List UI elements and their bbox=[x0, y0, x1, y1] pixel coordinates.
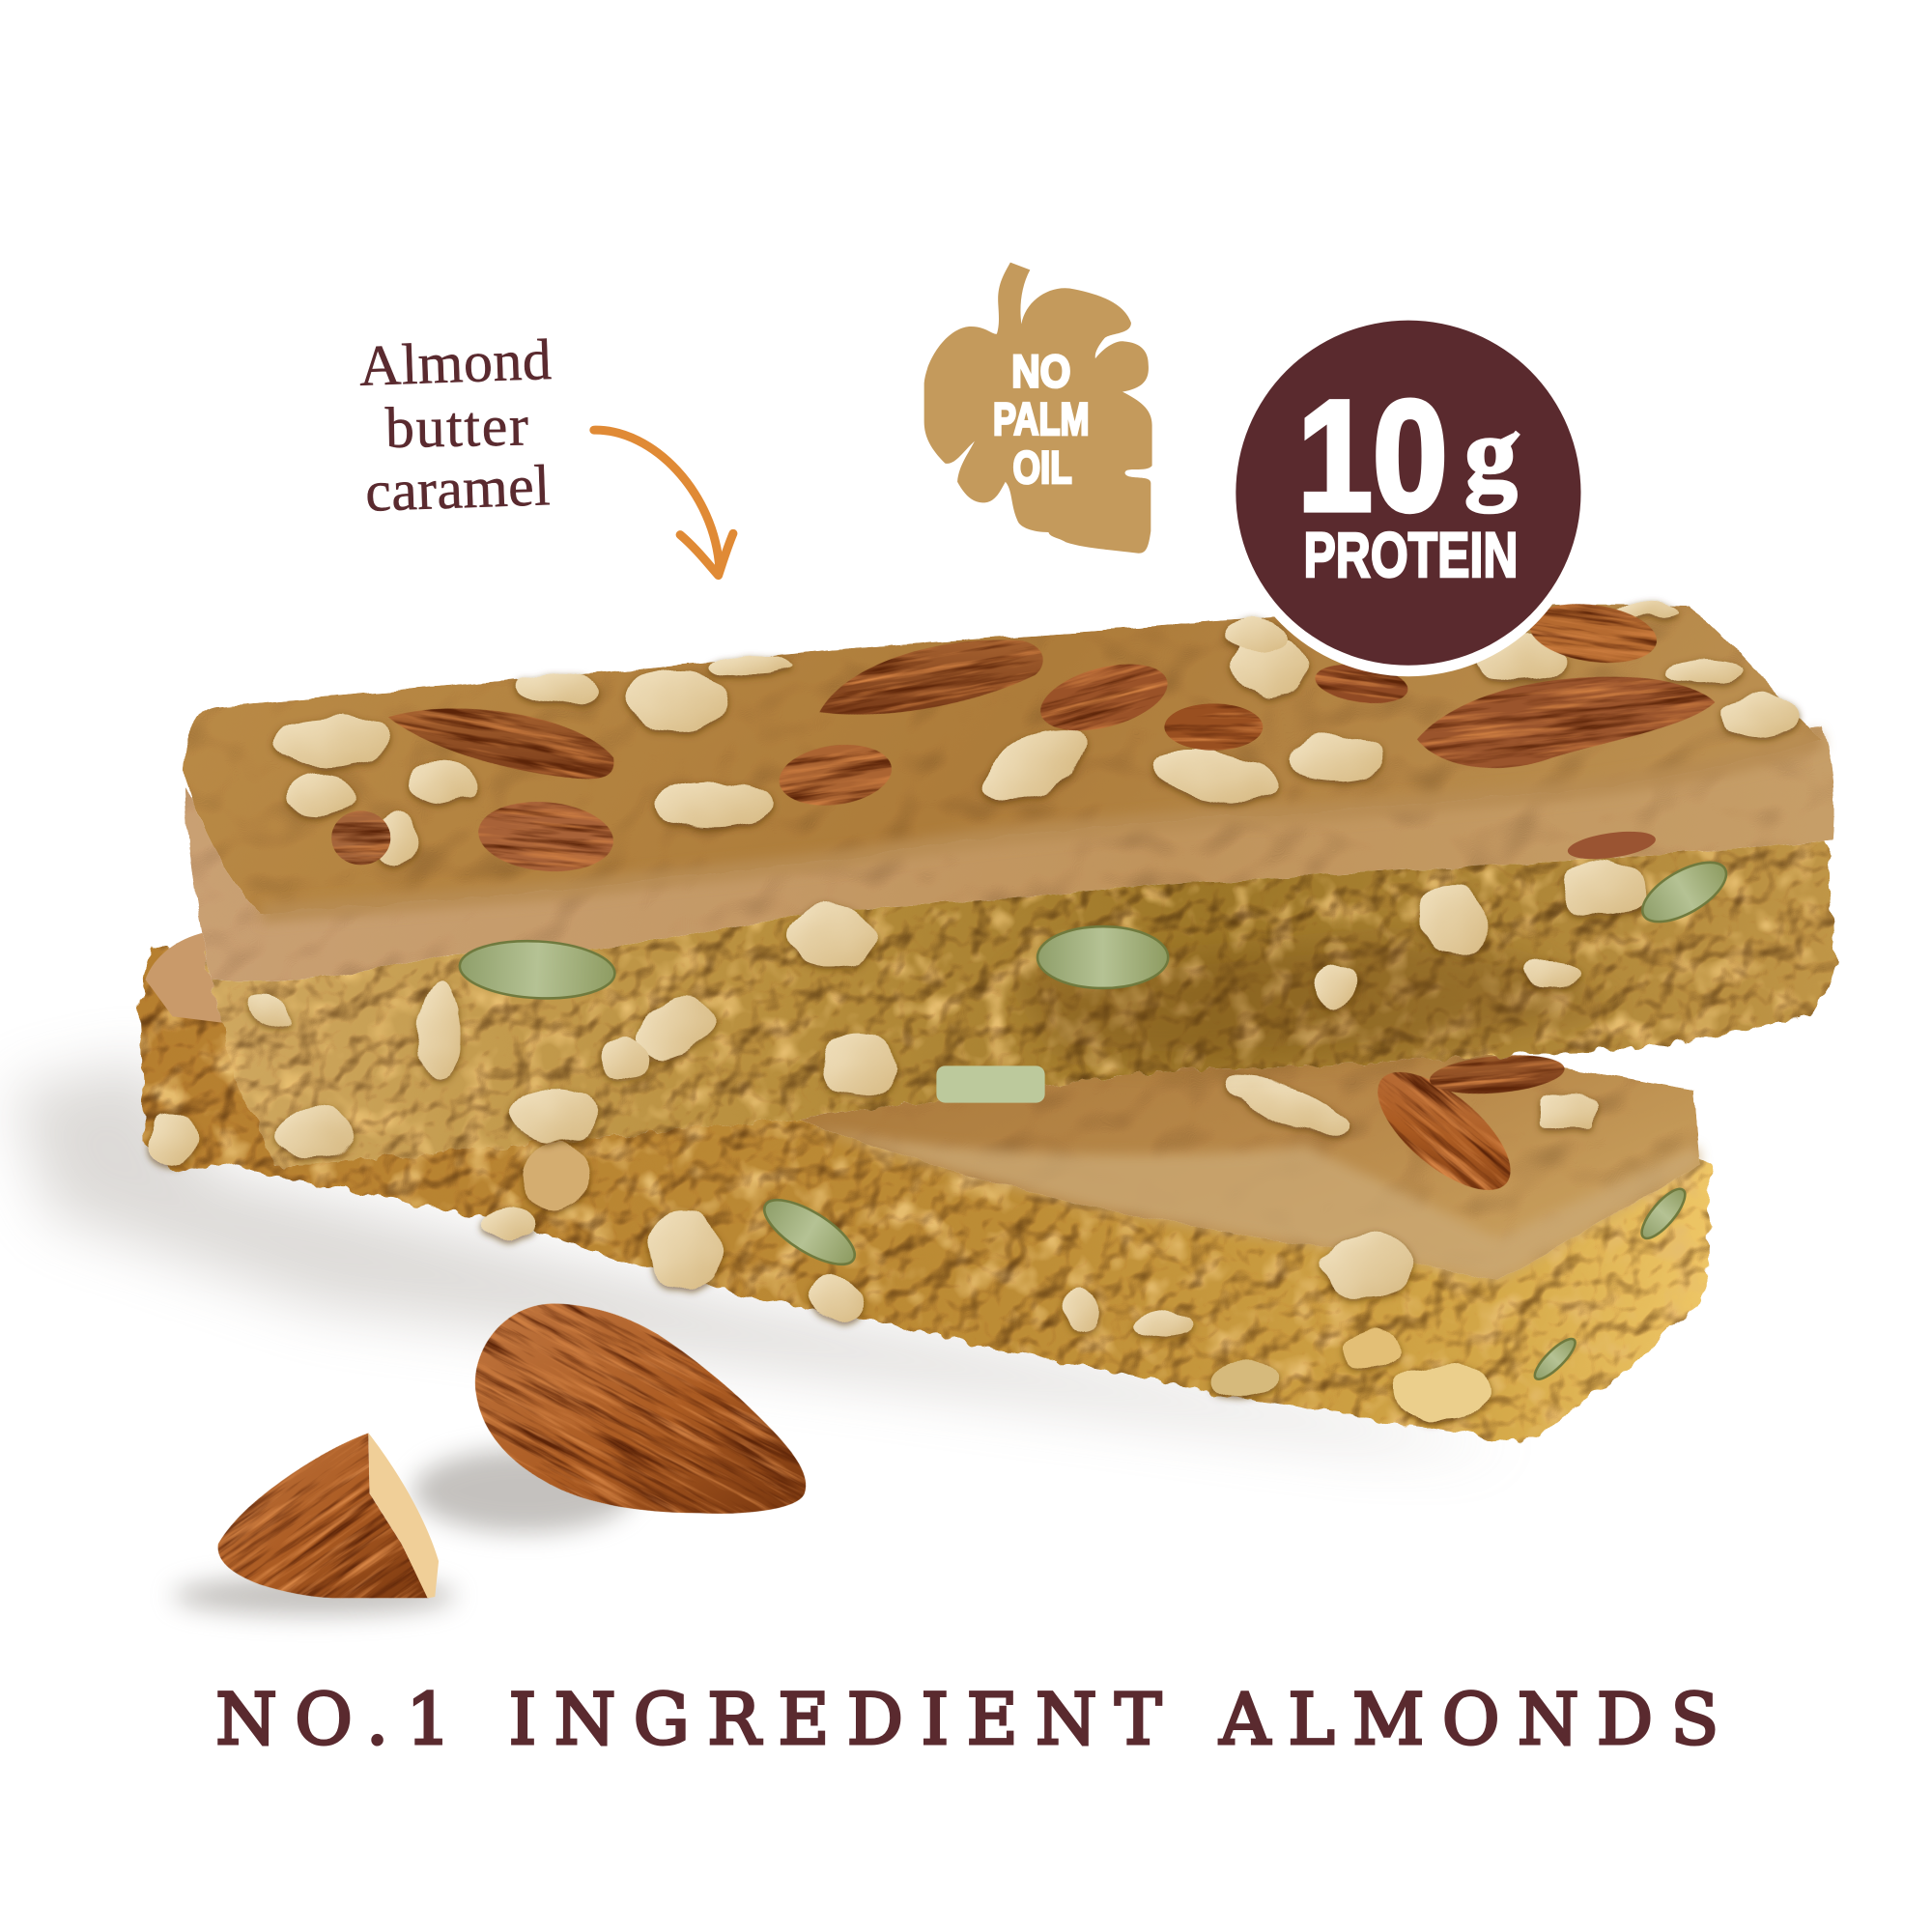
upper bar whole almonds bbox=[331, 596, 1724, 877]
badge label: PROTEIN bbox=[1303, 520, 1518, 591]
whole almond bbox=[388, 1166, 893, 1651]
upper bar granola bbox=[203, 838, 1837, 1167]
leaf text bbox=[993, 347, 1090, 494]
lower bar almonds bbox=[1359, 1050, 1566, 1210]
badge: no palm oil leaf bbox=[924, 263, 1152, 554]
arrow bbox=[594, 430, 733, 576]
whole almond shadow bbox=[412, 1449, 635, 1533]
half almond skin bbox=[140, 1334, 506, 1697]
caption: Almond butter caramel: Almond bbox=[358, 327, 553, 398]
lower bar nuts bbox=[146, 1068, 1595, 1422]
badge unit: g bbox=[1464, 394, 1518, 512]
half almond shadow bbox=[173, 1576, 456, 1615]
upper bar bbox=[183, 596, 1837, 1167]
caption: Almond butter caramel: butter bbox=[384, 393, 528, 460]
upper bar caramel front band bbox=[185, 727, 1834, 981]
almond right bbox=[1407, 645, 1724, 799]
leaf text: OIL bbox=[1012, 442, 1072, 494]
whole almond body bbox=[388, 1166, 893, 1651]
smaller almond pieces bbox=[331, 596, 1661, 877]
badge unit ear bbox=[1501, 433, 1518, 453]
badge white ring bbox=[1229, 317, 1588, 676]
lower bar pumpkin seeds bbox=[755, 1183, 1691, 1384]
leaf text: NO bbox=[1011, 347, 1070, 398]
badge: 10g protein bbox=[1229, 317, 1588, 676]
headline: NO.1 INGREDIENT ALMONDS bbox=[215, 1680, 1719, 1761]
badge big number: 10 bbox=[1297, 367, 1448, 544]
half almond bbox=[140, 1334, 506, 1697]
lower bar caramel top bbox=[788, 1055, 1700, 1282]
upper bar caramel edge softening bbox=[261, 739, 1821, 914]
upper bar dark crumb shadow bbox=[1010, 936, 1614, 1062]
shadow beneath bars bbox=[13, 1060, 1516, 1448]
upper bar chopped almonds bbox=[239, 607, 1801, 1158]
caption: Almond butter caramel: caramel bbox=[364, 453, 552, 524]
almond left bbox=[376, 669, 626, 817]
lower bar caramel end bbox=[146, 933, 222, 1023]
upper bar pumpkin seeds bbox=[458, 850, 1735, 1103]
caption: Almond butter caramel bbox=[358, 327, 553, 524]
badge circle bbox=[1236, 321, 1580, 666]
lower bar granola base bbox=[139, 947, 1710, 1441]
leaf shape bbox=[924, 263, 1152, 554]
lower bar bbox=[139, 933, 1710, 1441]
lower bar caramel front face bbox=[813, 1127, 1700, 1282]
almond centre bbox=[807, 602, 1056, 753]
leaf text: PALM bbox=[993, 394, 1090, 445]
half almond cut face bbox=[368, 1433, 439, 1598]
upper bar caramel top face bbox=[183, 605, 1821, 914]
